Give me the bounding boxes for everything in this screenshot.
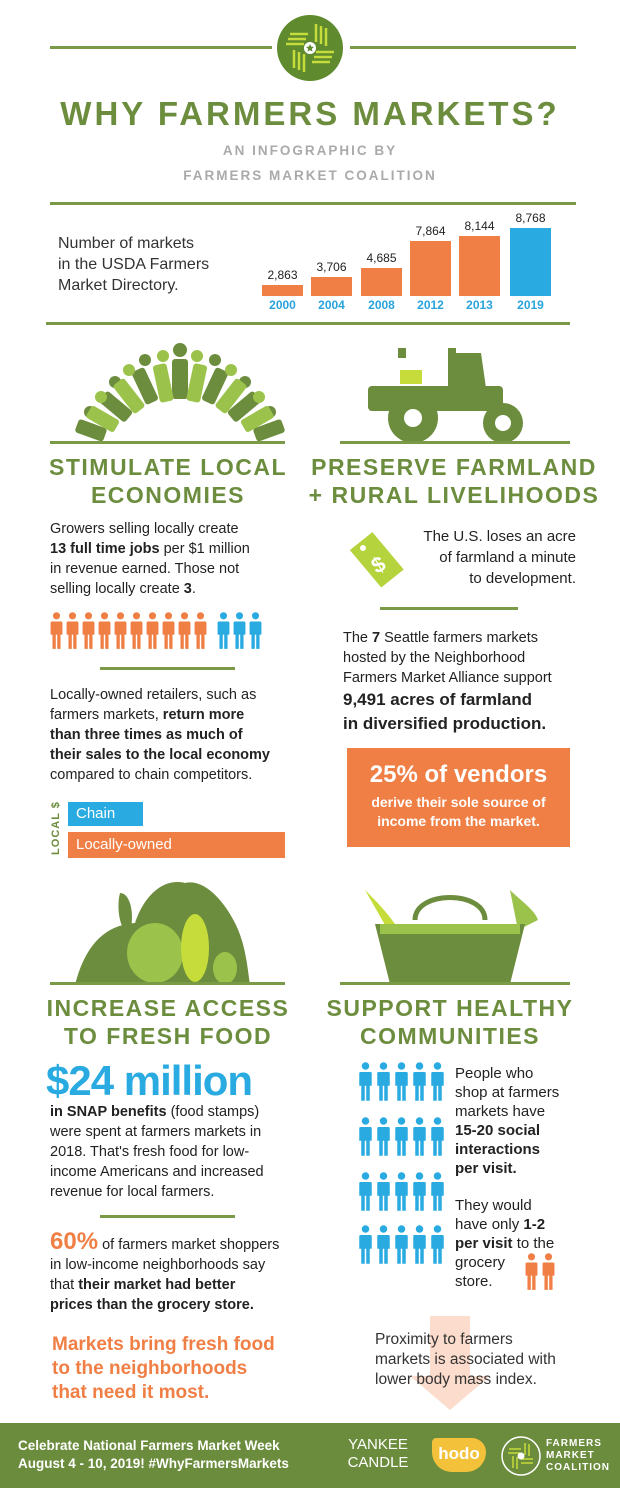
- text: grocery: per visit to the: [455, 1235, 554, 1252]
- bar chart caption: Market Directory.: [58, 277, 179, 294]
- bar chart: 2000: [269, 298, 296, 312]
- heading: preserve farmland: PRESERVE FARMLAND: [311, 454, 597, 480]
- text: local retailers: [50, 687, 270, 783]
- bar chart: [262, 211, 551, 312]
- heading: preserve farmland: + RURAL LIVELIHOODS: [309, 482, 599, 508]
- subtitle: FARMERS MARKET COALITION: [183, 168, 437, 183]
- callout: 25% vendors: [347, 748, 570, 847]
- callout: markets bring fresh food: Markets bring fresh food: [52, 1334, 275, 1355]
- title: WHY FARMERS MARKETS?: [60, 95, 560, 132]
- heading: preserve farmland: [309, 454, 599, 508]
- header rule left: [50, 46, 272, 49]
- logo: hodo: hodo: [438, 1444, 480, 1463]
- text: local retailers: than three times as much of: [50, 727, 243, 743]
- bar chart: 8,768: [515, 211, 546, 225]
- text: seattle: Farmers Market Alliance support: [343, 670, 552, 686]
- callout: markets bring fresh food: [52, 1334, 275, 1403]
- icon: bag: [365, 890, 538, 982]
- bar chart caption: Number of markets: [58, 235, 194, 252]
- bar chart: 7,864: [415, 224, 446, 238]
- text: local retailers: their sales to the local economy: [50, 747, 270, 763]
- icon: price tag: [350, 532, 404, 588]
- text: proximity: [375, 1331, 556, 1388]
- text: social interactions: People who: [455, 1065, 533, 1082]
- icon: vegetables: [76, 882, 250, 982]
- heading: stimulate local economies: ECONOMIES: [91, 482, 245, 508]
- text: jobs: Growers selling locally create: [50, 521, 239, 537]
- footer: [0, 1423, 620, 1488]
- heading: support healthy communities: [326, 995, 573, 1049]
- heading: support healthy communities: SUPPORT HEALTHY: [326, 995, 573, 1021]
- text: acre: of farmland a minute: [439, 549, 576, 566]
- heading: increase access: INCREASE ACCESS: [47, 995, 289, 1021]
- text: social interactions: [455, 1065, 559, 1177]
- text: proximity: markets is associated with: [375, 1351, 556, 1368]
- text: seattle: [343, 630, 552, 733]
- text: 60%: [50, 1228, 279, 1313]
- text: local retailers: Locally-owned retailers, such as: [50, 687, 256, 703]
- text: grocery: [455, 1197, 554, 1290]
- bar chart: 3,706: [316, 260, 347, 274]
- subtitle: [183, 143, 437, 183]
- chart: local $: Locally-owned: [76, 836, 172, 853]
- people grid: [359, 1062, 444, 1264]
- text: jobs: in revenue earned. Those not: [50, 561, 239, 577]
- text: snap: 2018. That's fresh food for low-: [50, 1144, 249, 1160]
- chart: local $: Chain: [76, 805, 115, 822]
- arrow: down: [411, 1316, 490, 1410]
- text: acre: to development.: [469, 570, 576, 587]
- heading: increase access: [47, 995, 289, 1049]
- logo: yankee candle: YANKEE: [348, 1436, 408, 1453]
- logo: farmers market coalition: MARKET: [546, 1450, 595, 1461]
- callout: markets bring fresh food: to the neighborhoods: [52, 1358, 247, 1379]
- icon: tractor: [368, 348, 523, 441]
- bar chart: 2019: [517, 298, 544, 312]
- text: proximity: Proximity to farmers: [375, 1331, 513, 1348]
- text: snap: in SNAP benefits (food stamps): [50, 1104, 259, 1120]
- text: jobs: 13 full time jobs per $1 million: [50, 541, 250, 557]
- bar chart: 2013: [466, 298, 493, 312]
- logo: farmers market coalition: [501, 1436, 610, 1476]
- heading: stimulate local economies: STIMULATE LOCAL: [49, 454, 287, 480]
- icon row: people jobs: [50, 612, 262, 649]
- text: grocery: have only 1-2: [455, 1216, 545, 1233]
- text: seattle: hosted by the Neighborhood: [343, 650, 525, 666]
- text: social interactions: 15-20 social: [455, 1122, 540, 1139]
- text: local retailers: farmers markets, return more: [50, 707, 244, 723]
- bar chart: 2008: [368, 298, 395, 312]
- text: social interactions: interactions: [455, 1141, 540, 1158]
- text: acre: The U.S. loses an acre: [423, 528, 576, 545]
- logo: farmers market coalition: FARMERS: [546, 1438, 602, 1449]
- text: snap: [50, 1104, 264, 1200]
- bar chart: 2004: [318, 298, 345, 312]
- text: local retailers: compared to chain competitors.: [50, 767, 252, 783]
- text: jobs: selling locally create 3.: [50, 581, 196, 597]
- footer text: [18, 1438, 289, 1471]
- text: social interactions: per visit.: [455, 1160, 517, 1177]
- text: seattle: 9,491 acres of farmland: [343, 690, 532, 709]
- icon: people circle: [75, 343, 285, 441]
- footer text: August 4 - 10, 2019! #WhyFarmersMarkets: [18, 1456, 289, 1471]
- text: proximity: lower body mass index.: [375, 1371, 537, 1388]
- text: grocery: They would: [455, 1197, 532, 1214]
- text: seattle: The 7 Seattle farmers markets: [343, 630, 538, 646]
- heading: increase access: TO FRESH FOOD: [64, 1023, 272, 1049]
- text: snap: revenue for local farmers.: [50, 1184, 214, 1200]
- logo: hodo: [432, 1438, 486, 1472]
- chart: local $: LOCAL $: [50, 801, 62, 855]
- header rule right: [350, 46, 576, 49]
- bar chart caption: in the USDA Farmers: [58, 256, 209, 273]
- text: 60%: prices than the grocery store.: [50, 1297, 254, 1313]
- text: grocery: store.: [455, 1273, 493, 1290]
- bar chart: 8,144: [464, 219, 495, 233]
- bar chart caption: [58, 235, 209, 294]
- bar chart: 4,685: [366, 251, 397, 265]
- subtitle: AN INFOGRAPHIC BY: [223, 143, 397, 158]
- text: 60%: 60% of farmers market shoppers: [50, 1228, 279, 1255]
- logo: yankee candle: [348, 1436, 408, 1471]
- text: snap: income Americans and increased: [50, 1164, 264, 1180]
- callout: 25% vendors: income from the market.: [377, 813, 540, 829]
- stat: $24 million: $24 million: [46, 1057, 252, 1104]
- logo: farmers market coalition: COALITION: [546, 1462, 610, 1473]
- text: social interactions: markets have: [455, 1103, 545, 1120]
- footer text: Celebrate National Farmers Market Week: [18, 1438, 280, 1453]
- text: 60%: in low-income neighborhoods say: [50, 1257, 265, 1273]
- callout: 25% vendors: 25% of vendors: [370, 761, 547, 788]
- bar chart: 2,863: [267, 268, 298, 282]
- text: jobs: [50, 521, 250, 597]
- icon: orange people: [526, 1253, 554, 1290]
- bar chart: 2012: [417, 298, 444, 312]
- text: 60%: that their market had better: [50, 1277, 235, 1293]
- icon: price tag: $: [367, 551, 390, 579]
- callout: markets bring fresh food: that need it most.: [52, 1382, 209, 1403]
- text: snap: were spent at farmers markets in: [50, 1124, 261, 1140]
- logo: yankee candle: CANDLE: [348, 1454, 408, 1471]
- heading: support healthy communities: COMMUNITIES: [360, 1023, 540, 1049]
- text: acre: [423, 528, 576, 587]
- text: grocery: grocery: [455, 1254, 505, 1271]
- text: social interactions: shop at farmers: [455, 1084, 559, 1101]
- logo: [277, 15, 343, 81]
- callout: 25% vendors: derive their sole source of: [371, 794, 546, 810]
- heading: stimulate local economies: [49, 454, 287, 508]
- chart: local $: [50, 801, 285, 858]
- text: seattle: in diversified production.: [343, 714, 546, 733]
